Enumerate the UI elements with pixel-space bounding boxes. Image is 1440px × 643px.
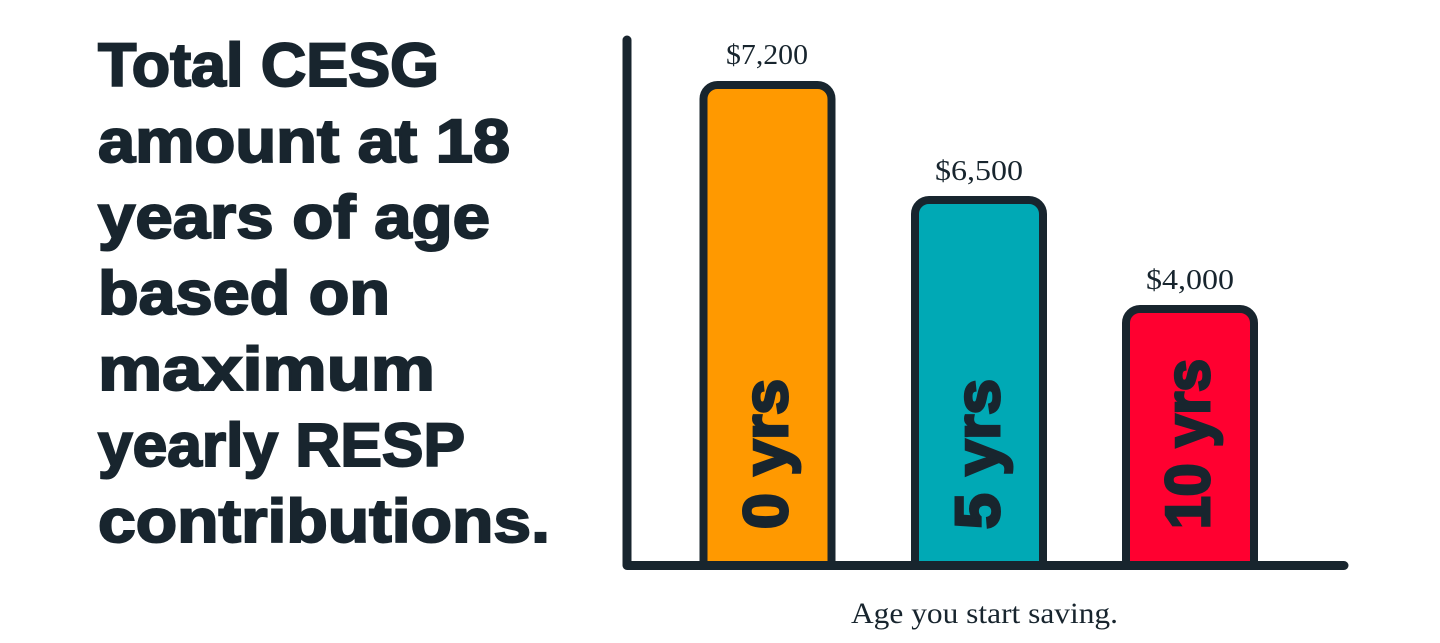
- title: [98, 31, 550, 555]
- value: $7,200: $7,200: [726, 39, 808, 71]
- title: based on: [98, 259, 390, 327]
- value: $4,000: $4,000: [1146, 264, 1234, 296]
- axes: [627, 40, 1344, 566]
- title: amount at 18: [98, 107, 510, 175]
- axis label: Age you start saving.: [851, 597, 1118, 630]
- title: Total CESG: [98, 31, 439, 99]
- bar: 10 yrs: 10 yrs: [1154, 359, 1223, 529]
- title: yearly RESP: [98, 411, 465, 479]
- value: $6,500: $6,500: [935, 155, 1023, 187]
- bar: 10 yrs: [1126, 309, 1254, 566]
- title: maximum: [98, 335, 435, 403]
- bar: 5 yrs: [915, 200, 1043, 566]
- title: years of age: [98, 183, 490, 251]
- bar: 0 yrs: 0 yrs: [732, 379, 801, 529]
- bar: 5 yrs: 5 yrs: [944, 379, 1013, 529]
- bar: 0 yrs: [704, 85, 832, 566]
- bar chart: [627, 39, 1344, 566]
- title: contributions.: [98, 487, 550, 555]
